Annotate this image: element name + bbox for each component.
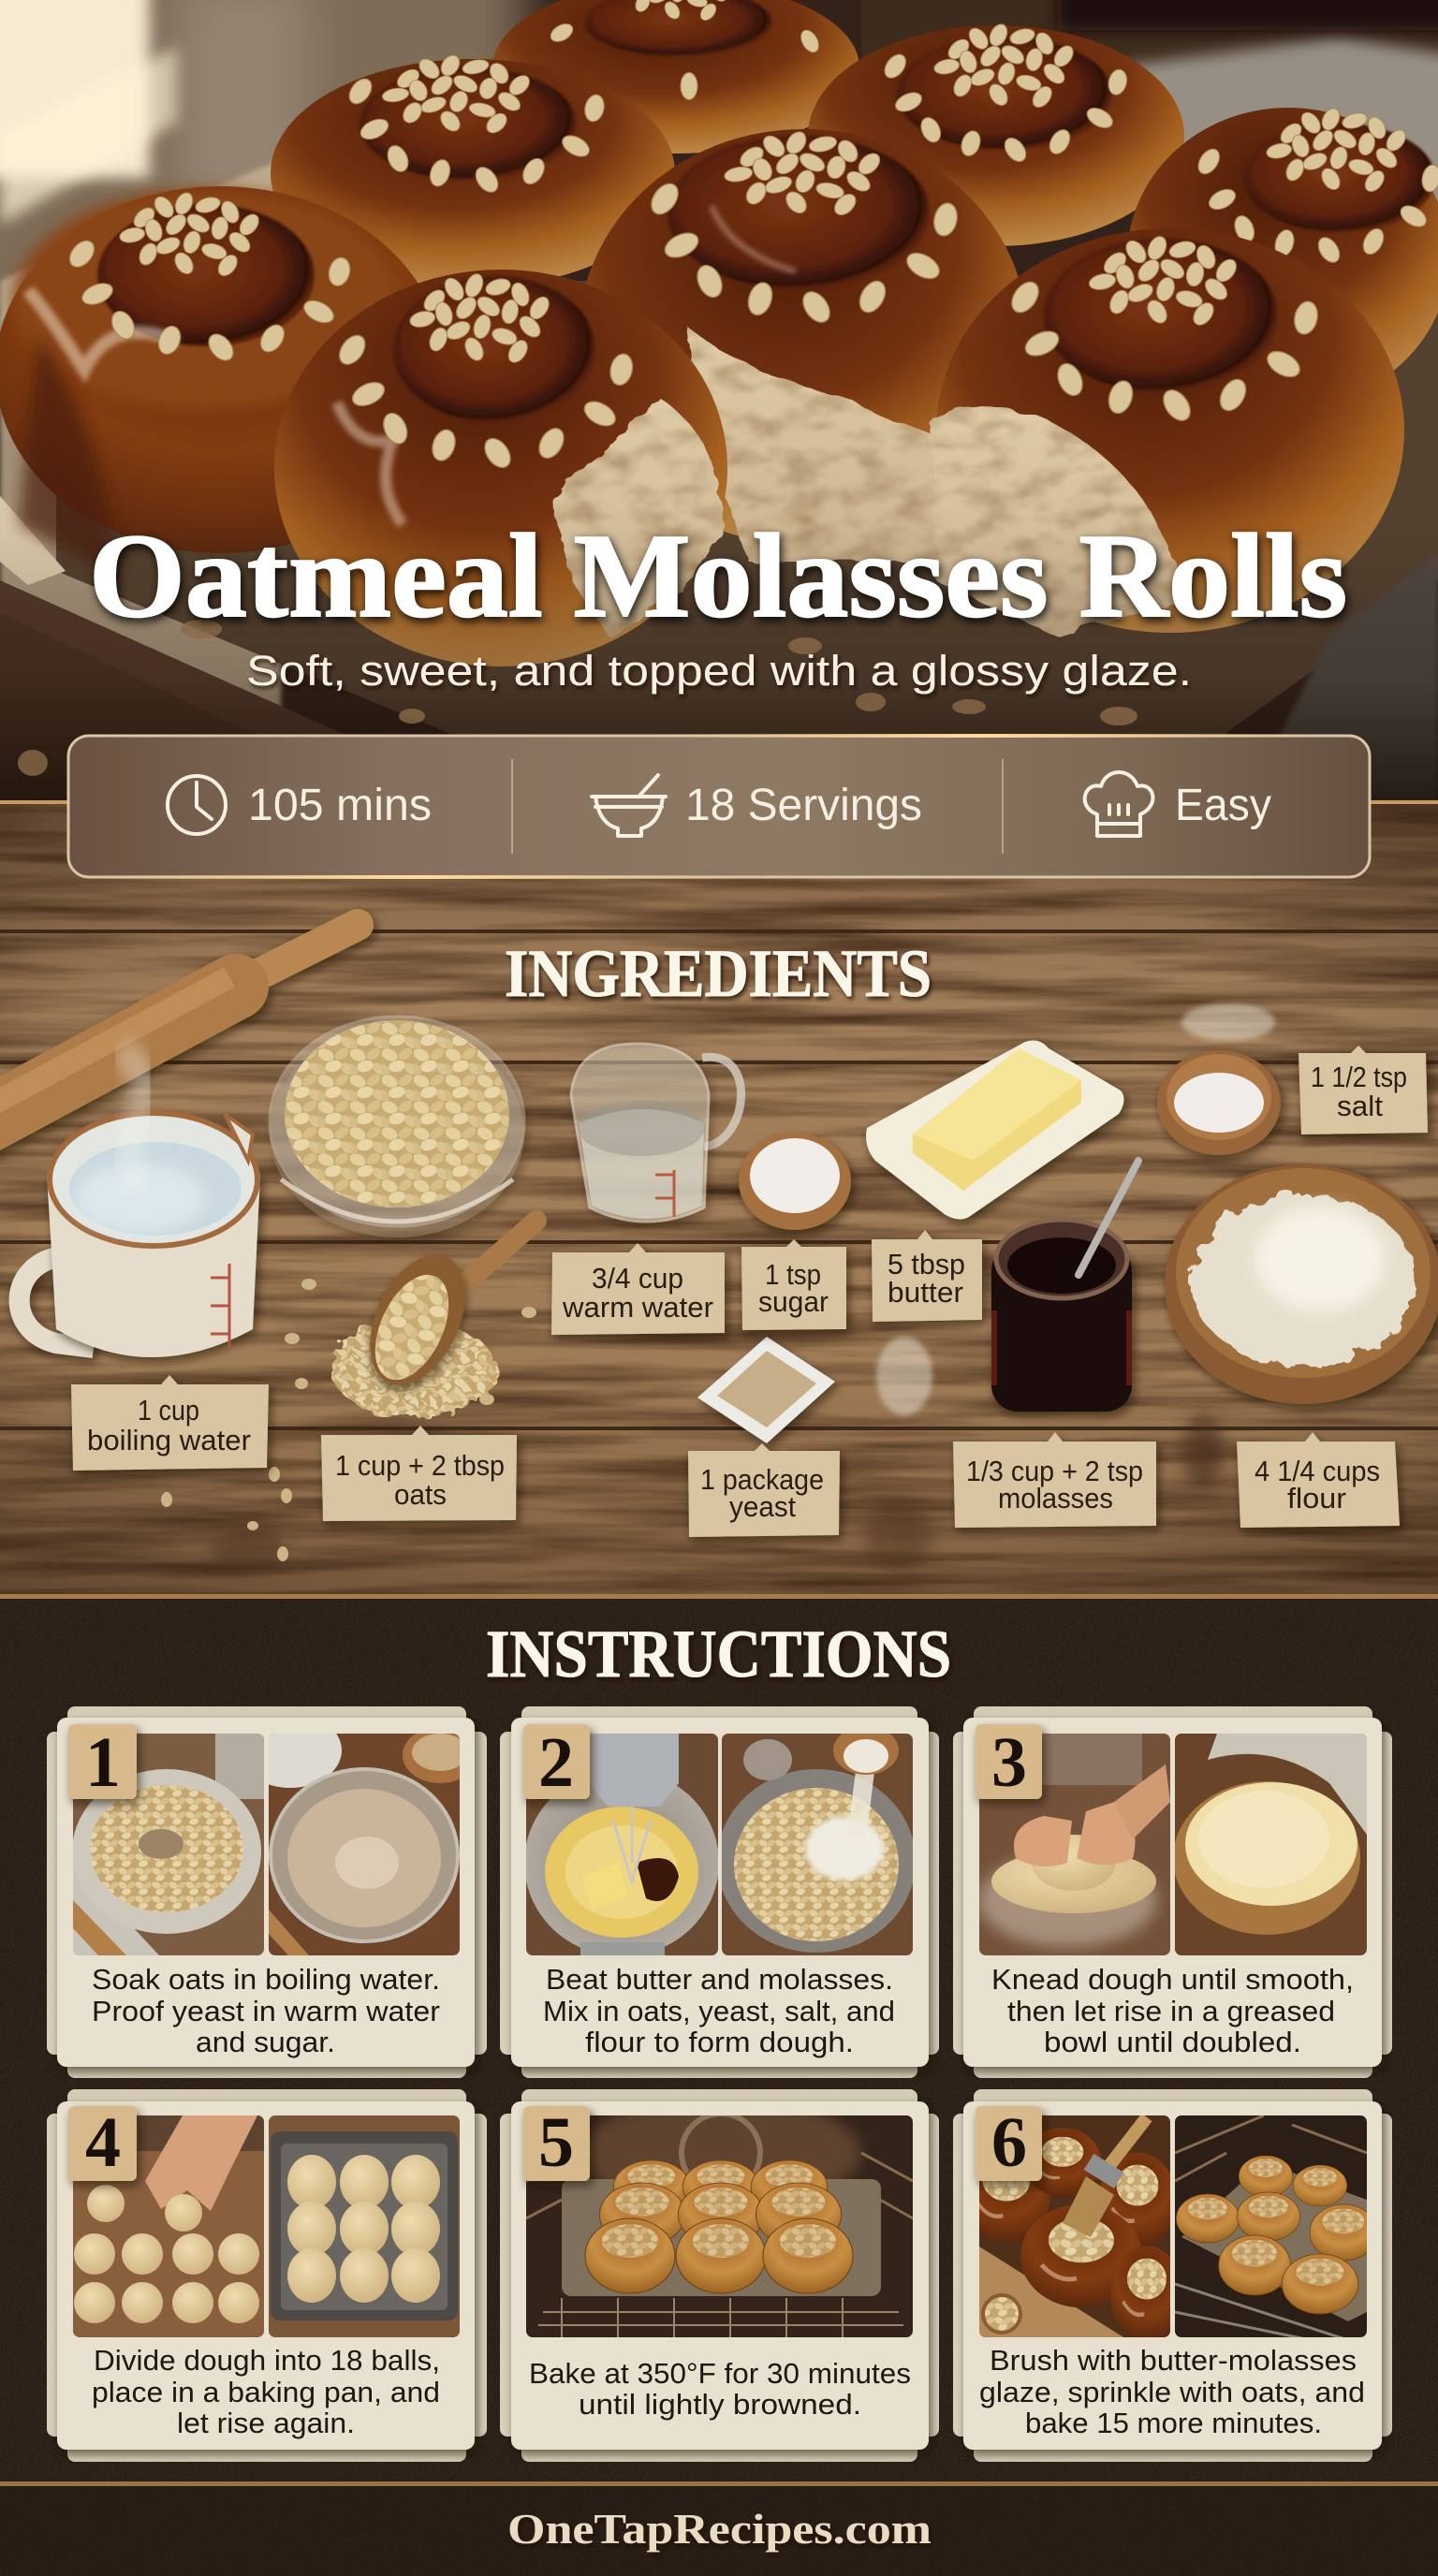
badge: step 5: 5 — [538, 2103, 574, 2182]
stat: time: 105 mins — [248, 781, 432, 830]
photo: baking in oven — [526, 2097, 913, 2337]
flour dust — [876, 1003, 1275, 1415]
label: boiling water — [71, 1375, 269, 1471]
icon: clock — [168, 776, 226, 834]
ingredient: sugar bowl — [739, 1133, 851, 1230]
ingredient: scoop with scattered oats — [161, 1221, 536, 1561]
roll: left — [0, 186, 445, 580]
step card 4 — [47, 2089, 487, 2462]
photo: mixing in oats and flour — [717, 1726, 916, 1955]
label: molasses — [953, 1432, 1156, 1528]
roll: top right — [808, 22, 1184, 246]
photo: kneading dough — [978, 1734, 1170, 1955]
ingredient: glass measuring cup — [571, 1044, 741, 1222]
label: yeast: 1 package — [700, 1463, 824, 1496]
label: boiling water: 1 cup — [138, 1394, 199, 1427]
roll: far right — [1129, 108, 1438, 371]
label: molasses: 1/3 cup + 2 tsp — [966, 1455, 1143, 1487]
wood table background — [0, 800, 1438, 1599]
label: warm water — [551, 1243, 725, 1335]
label: sugar: sugar — [758, 1285, 829, 1318]
icon: chef hat — [1085, 772, 1152, 836]
stat: servings: 18 Servings — [685, 781, 922, 830]
photo: rolls returning to oven — [1175, 2115, 1377, 2340]
text: step 4: let rise again. — [177, 2407, 355, 2439]
badge: step 1: 1 — [85, 1723, 121, 1802]
step card 5 — [500, 2089, 939, 2462]
text: step 6: glaze, sprinkle with oats, and — [979, 2376, 1365, 2408]
label: yeast — [688, 1443, 840, 1537]
ingredient: glass bowl of oats — [270, 1017, 524, 1237]
roll: center with torn crumb — [579, 129, 1028, 562]
text: step 5 — [529, 2357, 911, 2421]
text: step 4: Divide dough into 18 balls, — [94, 2344, 440, 2377]
stats bar — [68, 734, 1370, 879]
ingredient: molasses jar with spoon — [991, 1161, 1138, 1412]
text: step 6: bake 15 more minutes. — [1025, 2407, 1322, 2439]
label: yeast: yeast — [729, 1490, 796, 1523]
photo: beating butter and molasses — [524, 1734, 719, 1956]
ingredient: flour bowl — [1165, 1164, 1438, 1404]
photo: soaking oats — [72, 1734, 271, 1955]
text: step 3: bowl until doubled. — [1044, 2026, 1301, 2058]
roll: back left — [271, 53, 675, 287]
photo: dough rising in bowl — [1173, 1734, 1367, 1955]
text: step 3 — [991, 1963, 1354, 2058]
label: salt — [1299, 1046, 1428, 1134]
text: step 2: Beat butter and molasses. — [546, 1963, 893, 1996]
badge: step 3: 3 — [991, 1723, 1027, 1802]
label: salt: salt — [1337, 1090, 1383, 1122]
label: molasses: molasses — [998, 1482, 1113, 1515]
footer: website: OneTapRecipes.com — [507, 2505, 932, 2553]
text: step 2: Mix in oats, yeast, salt, and — [543, 1995, 895, 2027]
ingredient: salt bowl — [1157, 1050, 1281, 1155]
icon: rolling pin — [0, 925, 358, 1123]
photo: proofing yeast — [239, 1713, 477, 1955]
heading: ingredients: INGREDIENTS — [505, 936, 932, 1011]
label: butter: butter — [888, 1276, 963, 1309]
label: sugar: 1 tsp — [765, 1258, 821, 1291]
crumbs on parchment — [18, 620, 1137, 776]
roll: front right with torn crumb — [932, 228, 1404, 637]
text: step 5: Bake at 350°F for 30 minutes — [529, 2357, 911, 2390]
ingredient: yeast packet — [697, 1337, 835, 1443]
hero background: board and parchment — [0, 159, 1438, 805]
stat: difficulty: Easy — [1175, 781, 1271, 830]
label: sugar — [741, 1239, 846, 1330]
text: step 1 — [92, 1963, 440, 2058]
text: step 6 — [979, 2344, 1365, 2439]
label: boiling water: boiling water — [87, 1424, 251, 1456]
badge: step 2: 2 — [538, 1723, 574, 1802]
label: flour — [1237, 1432, 1400, 1528]
label: butter: 5 tbsp — [888, 1248, 965, 1281]
photo: dividing dough — [73, 2115, 264, 2337]
label: salt: 1 1/2 tsp — [1311, 1061, 1407, 1093]
label: flour: 4 1/4 cups — [1255, 1455, 1380, 1487]
label: oats — [321, 1426, 517, 1521]
icon: bowl — [592, 775, 666, 836]
label: oats: 1 cup + 2 tbsp — [335, 1449, 505, 1482]
text: step 3: Knead dough until smooth, — [991, 1963, 1354, 1996]
step card 3 — [953, 1706, 1392, 2078]
text: step 2: flour to form dough. — [585, 2026, 854, 2058]
panel: instructions background — [0, 1594, 1438, 2576]
badge: step 6 — [976, 2103, 1042, 2182]
badge: step 3 — [976, 1723, 1042, 1802]
badge: step 4 — [68, 2103, 137, 2182]
text: step 3: then let rise in a greased — [1007, 1995, 1335, 2027]
step card 2 — [500, 1706, 939, 2078]
title: Oatmeal Molasses Rolls — [89, 509, 1347, 642]
badge: step 1 — [68, 1723, 137, 1802]
step card 6 — [953, 2089, 1392, 2462]
hero background: window light and curtain — [0, 0, 1438, 393]
text: step 1: and sugar. — [196, 2026, 335, 2058]
text: step 4 — [92, 2344, 440, 2439]
text: step 1: Soak oats in boiling water. — [92, 1963, 440, 1996]
photo: brushing glaze — [962, 2115, 1183, 2341]
ingredient: butter on dish — [866, 1041, 1124, 1220]
label: warm water: warm water — [562, 1291, 713, 1324]
ingredient: boiling water cup — [20, 1048, 260, 1357]
label: oats: oats — [394, 1478, 447, 1511]
heading: instructions: INSTRUCTIONS — [486, 1617, 951, 1691]
subtitle: Soft, sweet, and topped with a glossy glaze. — [246, 647, 1192, 695]
text: step 1: Proof yeast in warm water — [92, 1995, 440, 2027]
step card 1 — [47, 1706, 487, 2078]
label: butter — [872, 1230, 982, 1322]
roll: top — [492, 0, 859, 154]
text: step 5: until lightly browned. — [579, 2388, 861, 2421]
text: step 6: Brush with butter-molasses — [990, 2344, 1357, 2377]
badge: step 2 — [523, 1723, 590, 1802]
label: flour: flour — [1287, 1482, 1346, 1515]
badge: step 4: 4 — [85, 2103, 121, 2182]
hero photo: oatmeal molasses rolls — [0, 0, 1438, 805]
photo: rolls in baking pan — [269, 2115, 460, 2337]
text: step 2 — [543, 1963, 895, 2058]
label: warm water: 3/4 cup — [592, 1262, 683, 1295]
roll: front left with torn crumb — [274, 270, 727, 666]
text: step 4: place in a baking pan, and — [92, 2376, 440, 2408]
badge: step 5 — [523, 2103, 590, 2182]
badge: step 6: 6 — [991, 2103, 1027, 2182]
